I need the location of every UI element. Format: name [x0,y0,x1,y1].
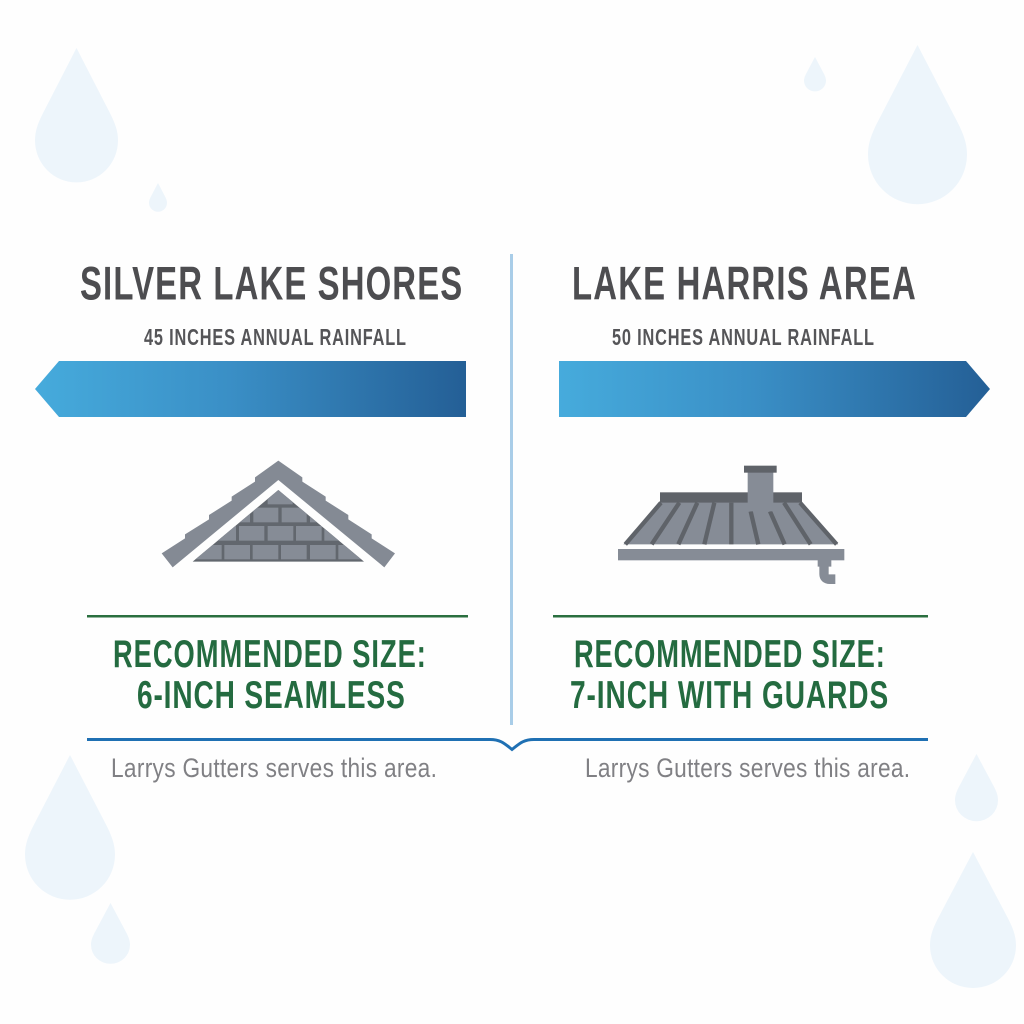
icon: gable roof [162,461,395,567]
green rule left [87,615,468,618]
panel: Silver Lake Shores [35,257,468,783]
footer note left: Larrys Gutters serves this area. [111,753,437,783]
arrow banner left [35,361,466,417]
arrow banner right [559,361,990,417]
recommendation right [570,633,888,717]
footer note right: Larrys Gutters serves this area. [585,753,910,783]
heading: Lake Harris Area: LAKE HARRIS AREA [572,257,916,310]
rainfall: 50 inches: 50 INCHES ANNUAL RAINFALL [612,325,874,351]
heading: Silver Lake Shores: SILVER LAKE SHORES [80,257,462,310]
blue brace [87,740,928,750]
panel: Lake Harris Area [553,257,990,783]
recommendation left: RECOMMENDED SIZE: [113,633,426,676]
center divider [510,254,513,725]
green rule right [553,615,928,618]
rainfall: 45 inches: 45 INCHES ANNUAL RAINFALL [144,325,406,351]
recommendation left [113,633,426,717]
recommendation right: RECOMMENDED SIZE: [574,633,885,676]
recommendation right: 7-INCH WITH GUARDS [570,674,888,717]
icon: low slope roof with gutter [618,466,844,584]
recommendation left: 6-INCH SEAMLESS [137,674,405,717]
